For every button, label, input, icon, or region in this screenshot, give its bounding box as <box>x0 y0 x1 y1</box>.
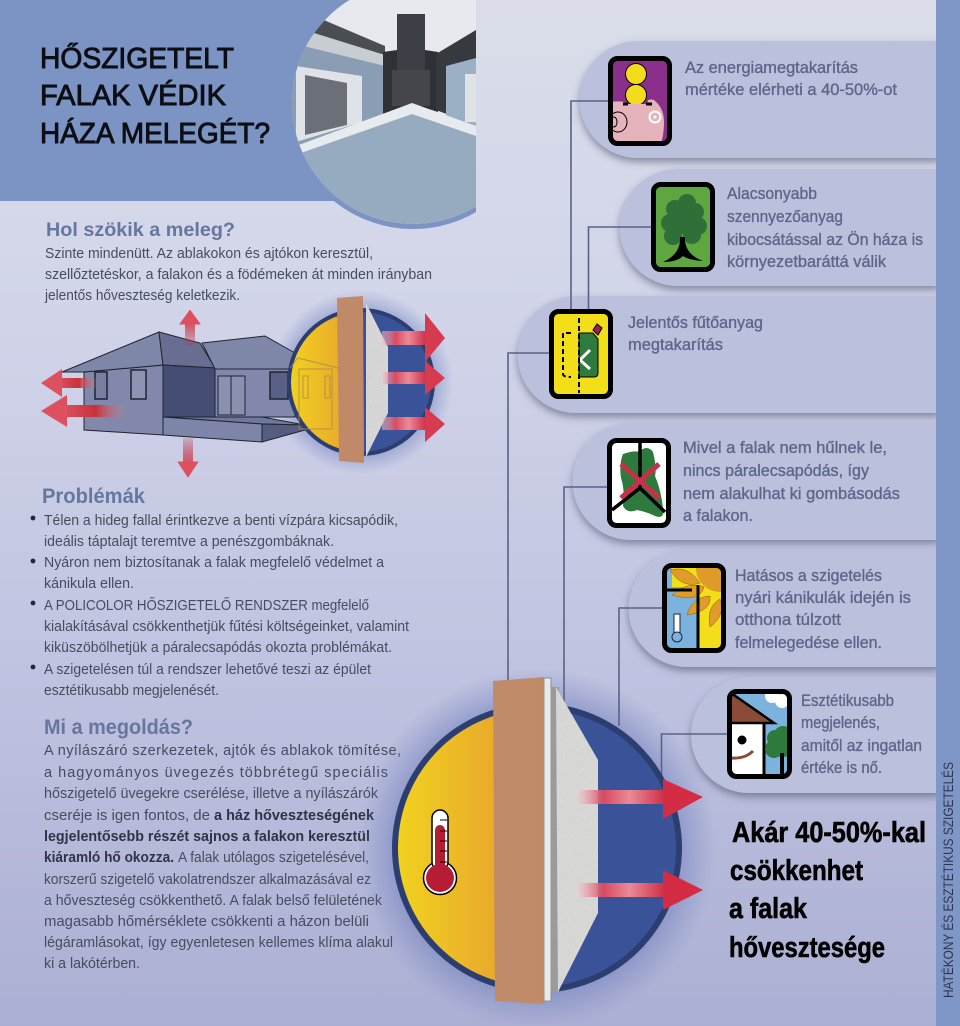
heat loss arrows around house <box>41 312 198 475</box>
arrows out of big wall <box>578 779 703 910</box>
benefit 2: lower emissions <box>651 182 923 272</box>
section: problems: kiküszöbölhetjük a páralecsapódás okozta problémákat. <box>44 640 392 656</box>
title: HÁZA MELEGÉT? <box>40 117 270 150</box>
section: problems: esztétikusabb megjelenését. <box>44 683 219 699</box>
text: nyári kánikulák idején is <box>735 589 911 607</box>
headline: heat loss reduction: csökkenhet <box>730 855 863 887</box>
text: Jelentős fűtőanyag <box>628 314 763 332</box>
house illustration <box>62 332 305 442</box>
text: környezetbaráttá válik <box>727 253 887 271</box>
section: where the heat escapes: Szinte mindenütt. Az ablakokon és ajtókon keresztül, <box>45 246 373 262</box>
text: Alacsonyabb <box>727 185 817 203</box>
title: HŐSZIGETELT <box>40 42 234 75</box>
section: solution: Mi a megoldás? <box>44 716 193 739</box>
text <box>735 567 911 652</box>
section: solution: a ház hőveszteségének <box>214 808 375 824</box>
text: szennyezőanyag <box>727 208 843 226</box>
big wall cross-section glow <box>357 668 717 1026</box>
text: értéke is nő. <box>801 759 882 777</box>
text: felmelegedése ellen. <box>735 634 882 652</box>
section: where the heat escapes: jelentős hőveszteség keletkezik. <box>44 288 240 304</box>
benefit 1: energy saving <box>608 56 897 146</box>
text <box>628 314 763 354</box>
section: problems: A POLICOLOR HŐSZIGETELŐ RENDSZER megfelelő <box>44 597 369 614</box>
section: solution <box>44 716 401 972</box>
icon: sun and thermometer in window <box>662 563 726 653</box>
section: problems: ideális táptalajt teremtve a penészgombáknak. <box>44 534 334 550</box>
headline: heat loss reduction: hővesztesége <box>729 932 885 964</box>
icon: thermometer <box>424 810 456 894</box>
section: solution: A nyílászáró szerkezetek, ajtók és ablakok tömítése, <box>44 743 401 759</box>
benefit 5: summer protection <box>662 563 910 653</box>
photo: house roof and chimney <box>292 0 476 229</box>
headline: heat loss reduction: Akár 40-50%-kal <box>732 817 926 849</box>
section: problems: kialakításával csökkenthetjük fűtési költségeinket, valamint <box>44 619 409 635</box>
section: problems: Télen a hideg fallal érintkezve a benti vízpára kicsapódik, <box>44 513 398 529</box>
section: problems: Problémák <box>42 485 145 508</box>
text <box>727 185 923 271</box>
text <box>801 692 922 777</box>
section: solution: A falak utólagos szigetelésével, <box>178 850 369 866</box>
text <box>685 59 897 99</box>
benefit 6: aesthetics <box>727 688 922 779</box>
text: otthona túlzott <box>735 611 841 629</box>
arrows out of small wall <box>382 313 445 442</box>
section: solution: cseréje is igen fontos, de <box>44 808 210 824</box>
text: nincs páralecsapódás, így <box>683 462 870 480</box>
section: solution: ki a lakótérben. <box>44 956 140 972</box>
text: amitől az ingatlan <box>801 737 922 755</box>
text: Mivel a falak nem hűlnek le, <box>683 439 887 457</box>
benefit pills <box>518 41 940 793</box>
section: solution: kiáramló hő okozza. <box>44 850 174 866</box>
title <box>40 42 270 150</box>
section: problems: A szigetelésen túl a rendszer lehetővé teszi az épület <box>44 662 371 678</box>
section: problems: kánikula ellen. <box>44 576 134 592</box>
icon: tree <box>651 182 715 272</box>
section: solution: légáramlásokat, így egyenletesen kellemes klíma alakul <box>44 935 393 951</box>
text: a falakon. <box>683 507 753 525</box>
section: solution: a hagyományos üvegezés többrétegű speciális <box>44 765 388 781</box>
header panel <box>0 0 476 229</box>
icon: fuel can <box>549 309 613 399</box>
text: nem alakulhat ki gombásodás <box>683 485 900 503</box>
section: solution: magasabb hőmérséklete csökkenti a házon belüli <box>44 914 369 930</box>
text: mértéke elérheti a 40-50%-ot <box>685 81 897 99</box>
headline: heat loss reduction: a falak <box>729 893 808 925</box>
section: solution: hőszigetelő üvegekre cserélése, illetve a nyílászárók <box>44 786 379 802</box>
section: where the heat escapes: Hol szökik a meleg? <box>46 220 235 241</box>
text: megjelenés, <box>801 714 880 732</box>
benefit 3: fuel saving <box>549 309 763 399</box>
text <box>683 439 900 525</box>
connector lines <box>508 101 727 782</box>
icon: smiling house <box>727 688 793 779</box>
benefit 4: no condensation <box>607 438 900 528</box>
big wall cross-section <box>390 677 703 1004</box>
text: Az energiamegtakarítás <box>685 59 858 77</box>
icon: mould crossed out <box>607 438 671 528</box>
section: solution: legjelentősebb részét sajnos a falakon keresztül <box>44 829 370 845</box>
icon: piggy bank <box>608 56 672 146</box>
section: solution: a hőveszteség csökkenthető. A falak belső felületének <box>44 893 383 909</box>
section: solution: korszerű szigetelő vakolatrendszer alkalmazásával ez <box>44 872 371 888</box>
text: megtakarítás <box>628 336 723 354</box>
text: Hatásos a szigetelés <box>735 567 882 585</box>
small wall cross-section <box>285 296 445 465</box>
text: Esztétikusabb <box>801 692 894 710</box>
right side strip <box>936 0 960 1026</box>
section: problems: Nyáron nem biztosítanak a falak megfelelő védelmet a <box>44 555 385 571</box>
small wall cross-section glow <box>269 290 453 474</box>
text: kibocsátással az Ön háza is <box>727 231 923 249</box>
title: FALAK VÉDIK <box>40 79 227 112</box>
headline: heat loss reduction <box>729 817 926 964</box>
section: problems <box>31 485 409 699</box>
section: where the heat escapes: szellőztetéskor, a falakon és a födémeken át minden irányban <box>45 267 432 283</box>
section: where the heat escapes <box>44 220 432 304</box>
vertical strip label: HATÉKONY ÉS ESZTÉTIKUS SZIGETELÉS <box>940 762 956 998</box>
